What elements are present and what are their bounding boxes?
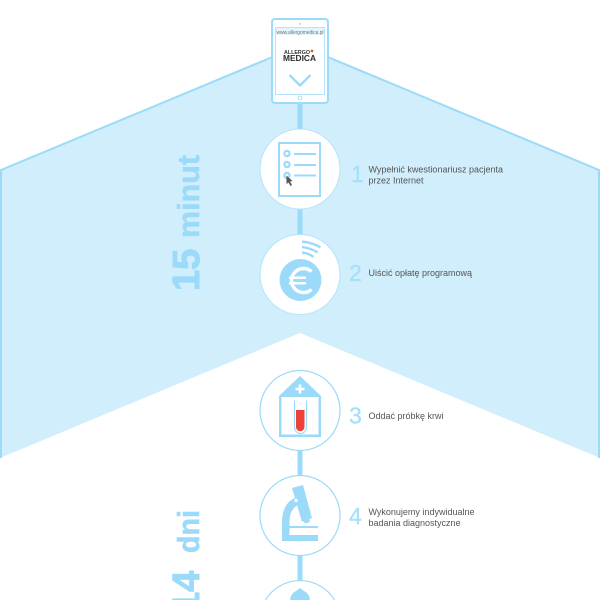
icon: tablet with website <box>272 19 328 103</box>
timeline connector: step 3 to step 5 <box>298 445 302 585</box>
step 3 number: 3 <box>349 402 362 428</box>
step 2 icon: euro payment <box>260 234 340 314</box>
icon: test tube <box>294 400 306 434</box>
step 4 number: 4 <box>349 503 362 529</box>
step 1 number: 1 <box>351 161 364 187</box>
step 3 icon: blood sample <box>260 370 340 450</box>
timeline connector: tablet to step 2 <box>298 100 302 240</box>
step 2 text: Uiścić opłatę programową <box>368 268 472 278</box>
logo: Allergo Medica: ALLERGO <box>284 50 310 56</box>
step 3 text: Oddać próbkę krwi <box>368 411 444 421</box>
step 4 text: Wykonujemy indywidualne <box>368 507 474 517</box>
time label: 15 minut: minut <box>171 155 206 238</box>
logo: Allergo Medica: MEDICA <box>283 53 316 63</box>
step 1 text: Wypełnić kwestionariusz pacjenta <box>368 164 503 174</box>
time label: 15 minut <box>166 155 208 291</box>
icon: mouse cursor <box>286 176 292 186</box>
step 4 text: badania diagnostyczne <box>368 518 461 528</box>
step 1 text: przez Internet <box>368 176 424 186</box>
step 2 number: 2 <box>349 260 362 286</box>
website address: www.allergomedica.pl <box>276 30 324 36</box>
step 1 icon: questionnaire <box>260 129 340 209</box>
icon: chevron down <box>290 75 310 86</box>
step 4 icon: microscope <box>260 476 340 556</box>
step 5 icon (cropped) <box>265 581 335 600</box>
time label: 14 dni <box>166 510 208 600</box>
time label: 14 dni: dni <box>171 510 206 553</box>
panel: 15 minutes chevron band <box>0 46 600 458</box>
time label: 15 minut: 15 <box>166 249 208 291</box>
